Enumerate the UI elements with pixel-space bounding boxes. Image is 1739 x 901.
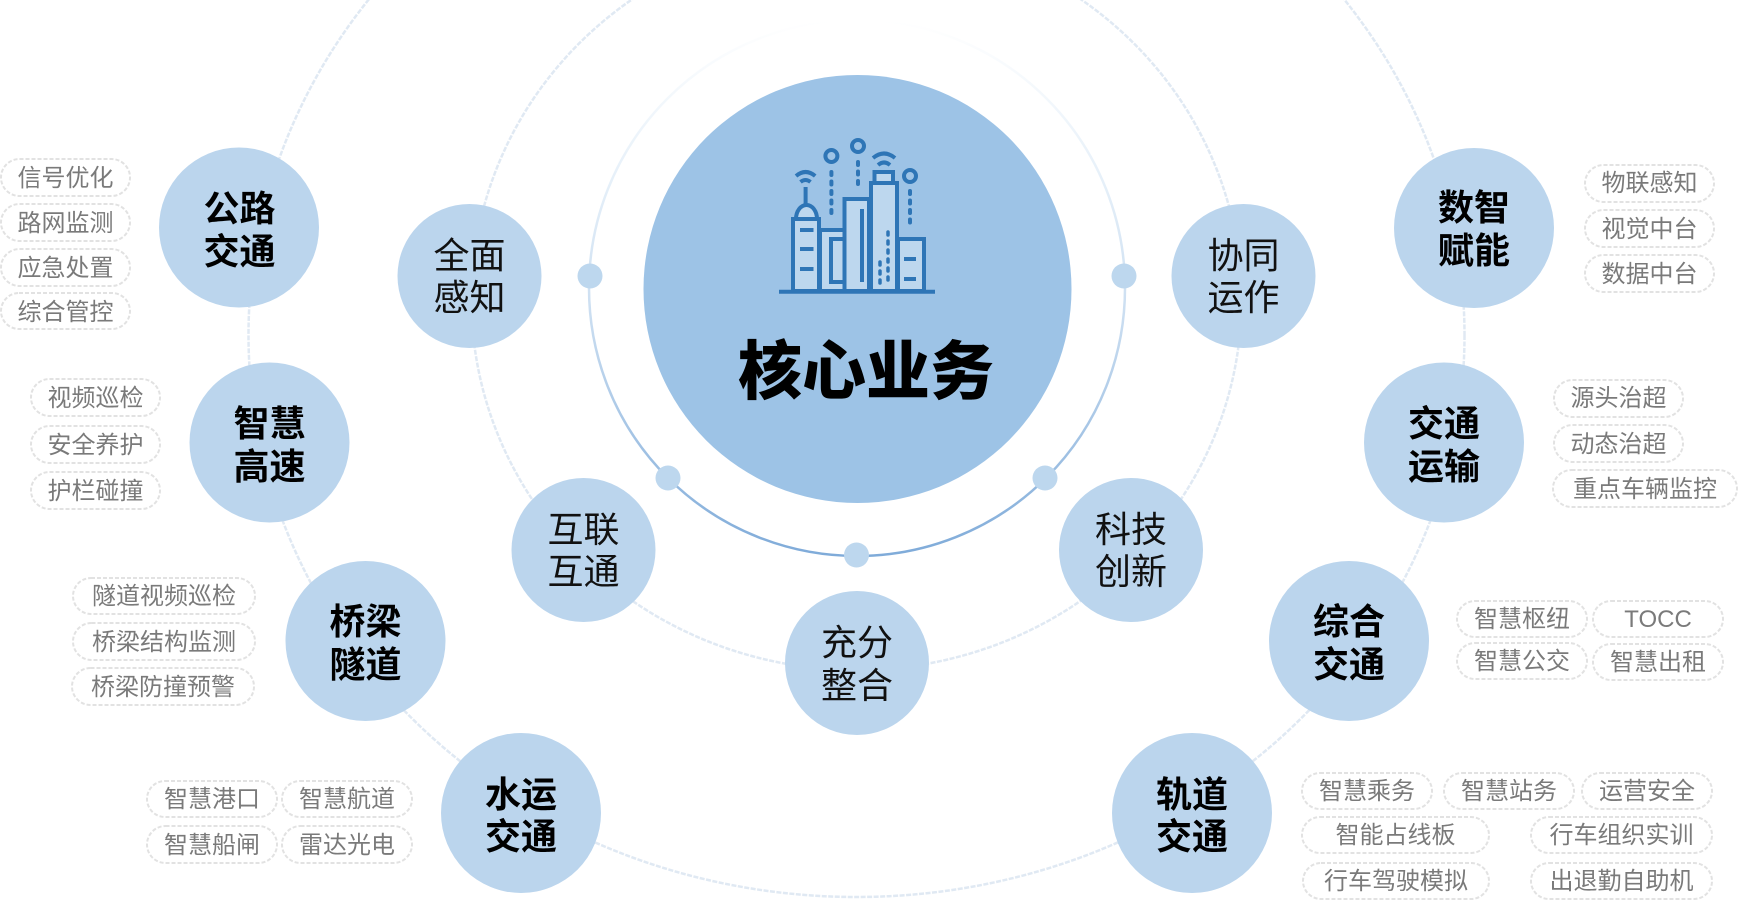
tags: 水运交通: 智慧航道 <box>299 786 395 813</box>
tags: 轨道交通: 智慧站务 <box>1461 778 1557 805</box>
node: 水运交通: 水运 <box>485 774 557 815</box>
node: 综合交通: 综合 <box>1313 601 1385 642</box>
middle node: 全面感知: 感知 <box>433 277 506 318</box>
tags: 水运交通: 雷达光电 <box>299 832 395 859</box>
tags: 轨道交通: 行车组织实训 <box>1550 822 1694 849</box>
tags: 数智赋能: 物联感知 <box>1602 170 1698 197</box>
middle node: 充分整合: 整合 <box>821 665 893 706</box>
tags: 综合交通: 智慧出租 <box>1610 649 1706 676</box>
tags: 数智赋能 <box>1585 165 1714 292</box>
tags: 公路交通: 综合管控 <box>18 299 114 326</box>
node: 交通运输 <box>1364 362 1524 522</box>
node: 公路交通: 交通 <box>203 231 276 272</box>
tags: 轨道交通: 行车驾驶模拟 <box>1324 868 1468 895</box>
panel: 交通运输 <box>1364 362 1737 522</box>
node: 综合交通: 交通 <box>1313 644 1385 685</box>
node: 桥梁隧道 <box>286 561 446 721</box>
node: 轨道交通: 轨道 <box>1156 774 1228 815</box>
middle node: 互联互通 <box>512 478 656 622</box>
node: 智慧高速: 智慧 <box>233 403 306 444</box>
middle node: 协同运作 <box>1172 204 1316 348</box>
middle node: 互联互通: 互联 <box>547 509 620 550</box>
panel: 桥梁隧道 <box>72 561 446 721</box>
tags: 公路交通: 路网监测 <box>18 210 114 237</box>
tags: 智慧高速 <box>31 379 160 509</box>
node: 水运交通: 交通 <box>485 816 557 857</box>
node: 轨道交通: 交通 <box>1156 816 1228 857</box>
tags: 智慧高速: 视频巡检 <box>48 385 144 412</box>
tags: 轨道交通: 智能占线板 <box>1336 822 1456 849</box>
middle orbit ring <box>472 0 1242 670</box>
tags: 公路交通: 信号优化 <box>18 165 114 192</box>
tags: 智慧高速: 护栏碰撞 <box>48 478 144 505</box>
outer orbit ring <box>248 0 1464 897</box>
tags: 综合交通 <box>1457 601 1723 680</box>
panel: 轨道交通 <box>1112 733 1712 899</box>
tags: 交通运输: 重点车辆监控 <box>1573 476 1717 503</box>
tags: 数智赋能: 数据中台 <box>1602 261 1698 288</box>
middle node: 科技创新: 科技 <box>1095 509 1167 550</box>
middle node: 科技创新: 创新 <box>1095 551 1167 592</box>
middle node: 充分整合: 充分 <box>821 622 893 663</box>
panel: 水运交通 <box>147 733 601 893</box>
core title: 核心业务 <box>738 336 994 408</box>
tags: 交通运输: 动态治超 <box>1570 431 1666 458</box>
node: 综合交通 <box>1269 561 1429 721</box>
middle node: 协同运作: 运作 <box>1207 277 1280 318</box>
tags: 轨道交通: 运营安全 <box>1599 778 1695 805</box>
panel: 公路交通 <box>1 148 319 329</box>
core circle <box>644 75 1072 503</box>
node: 公路交通 <box>159 148 319 308</box>
tags: 公路交通 <box>1 159 130 329</box>
tags: 公路交通: 应急处置 <box>18 255 114 282</box>
tags: 综合交通: 智慧枢纽 <box>1474 606 1570 633</box>
node: 智慧高速 <box>190 362 350 522</box>
middle node: 互联互通: 互通 <box>547 551 620 592</box>
node: 交通运输: 交通 <box>1408 403 1480 444</box>
tags: 交通运输: 源头治超 <box>1570 385 1666 412</box>
tags: 智慧高速: 安全养护 <box>48 432 144 459</box>
node: 桥梁隧道: 桥梁 <box>329 601 402 642</box>
tags: 桥梁隧道: 桥梁防撞预警 <box>91 674 235 701</box>
node: 数智赋能: 数智 <box>1438 187 1510 228</box>
middle node: 全面感知 <box>398 204 542 348</box>
icon: smart city skyline <box>779 140 935 292</box>
tags: 桥梁隧道 <box>72 578 255 705</box>
node: 水运交通 <box>441 733 601 893</box>
tags: 水运交通: 智慧港口 <box>164 786 260 813</box>
node: 智慧高速: 高速 <box>233 446 306 487</box>
tags: 综合交通: 智慧公交 <box>1474 648 1570 675</box>
tags: 水运交通: 智慧船闸 <box>164 832 260 859</box>
middle node: 科技创新 <box>1059 478 1203 622</box>
middle node: 充分整合 <box>785 591 929 735</box>
tags: 桥梁隧道: 桥梁结构监测 <box>92 629 236 656</box>
node: 交通运输: 运输 <box>1408 446 1480 487</box>
panel: 综合交通 <box>1269 561 1723 721</box>
panel: 智慧高速 <box>31 362 350 522</box>
middle node: 全面感知: 全面 <box>433 235 506 276</box>
panel: 数智赋能 <box>1394 148 1714 308</box>
node: 数智赋能: 赋能 <box>1438 230 1510 271</box>
node: 数智赋能 <box>1394 148 1554 308</box>
inner orbit ring with dots <box>578 20 1136 568</box>
tags: 数智赋能: 视觉中台 <box>1602 216 1698 243</box>
tags: 交通运输 <box>1553 380 1737 507</box>
node: 轨道交通 <box>1112 733 1272 893</box>
middle node: 协同运作: 协同 <box>1207 235 1280 276</box>
tags: 综合交通: TOCC <box>1624 606 1692 633</box>
tags: 轨道交通 <box>1302 773 1712 899</box>
tags: 水运交通 <box>147 781 412 863</box>
tags: 轨道交通: 出退勤自助机 <box>1550 868 1694 895</box>
tags: 轨道交通: 智慧乘务 <box>1319 778 1415 805</box>
node: 桥梁隧道: 隧道 <box>329 644 402 685</box>
node: 公路交通: 公路 <box>203 188 276 229</box>
tags: 桥梁隧道: 隧道视频巡检 <box>92 583 236 610</box>
